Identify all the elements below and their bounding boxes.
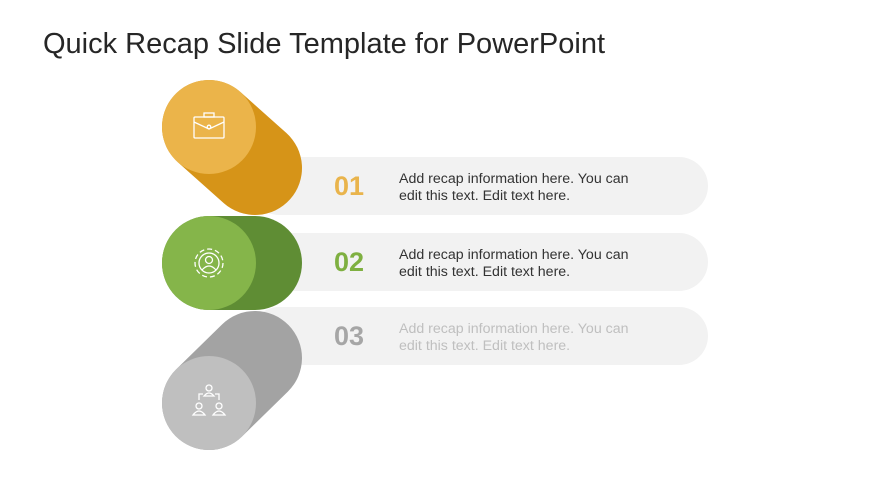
pill 03 — [250, 307, 708, 365]
pill 01 — [250, 157, 708, 215]
pill 02: Add recap information here. You can — [399, 247, 629, 263]
pill 01: edit this text. Edit text here. — [399, 188, 570, 204]
cylinder 1 orange — [162, 80, 256, 174]
pill 02: edit this text. Edit text here. — [399, 264, 570, 280]
pill 03: Add recap information here. You can — [399, 321, 629, 337]
title: Quick Recap Slide Template for PowerPoint — [43, 28, 605, 60]
pill 03: edit this text. Edit text here. — [399, 338, 570, 354]
icon: gear person — [195, 249, 223, 277]
pill 02 — [250, 233, 708, 291]
pill 02: 02 — [334, 247, 364, 277]
cylinder 2 green — [162, 216, 256, 310]
pill 01: 01 — [334, 171, 364, 201]
pill 03: 03 — [334, 321, 364, 351]
pill 01: Add recap information here. You can — [399, 171, 629, 187]
icon: hierarchy — [193, 385, 225, 415]
cylinder 3 gray — [162, 356, 256, 450]
icon: briefcase — [194, 113, 224, 138]
